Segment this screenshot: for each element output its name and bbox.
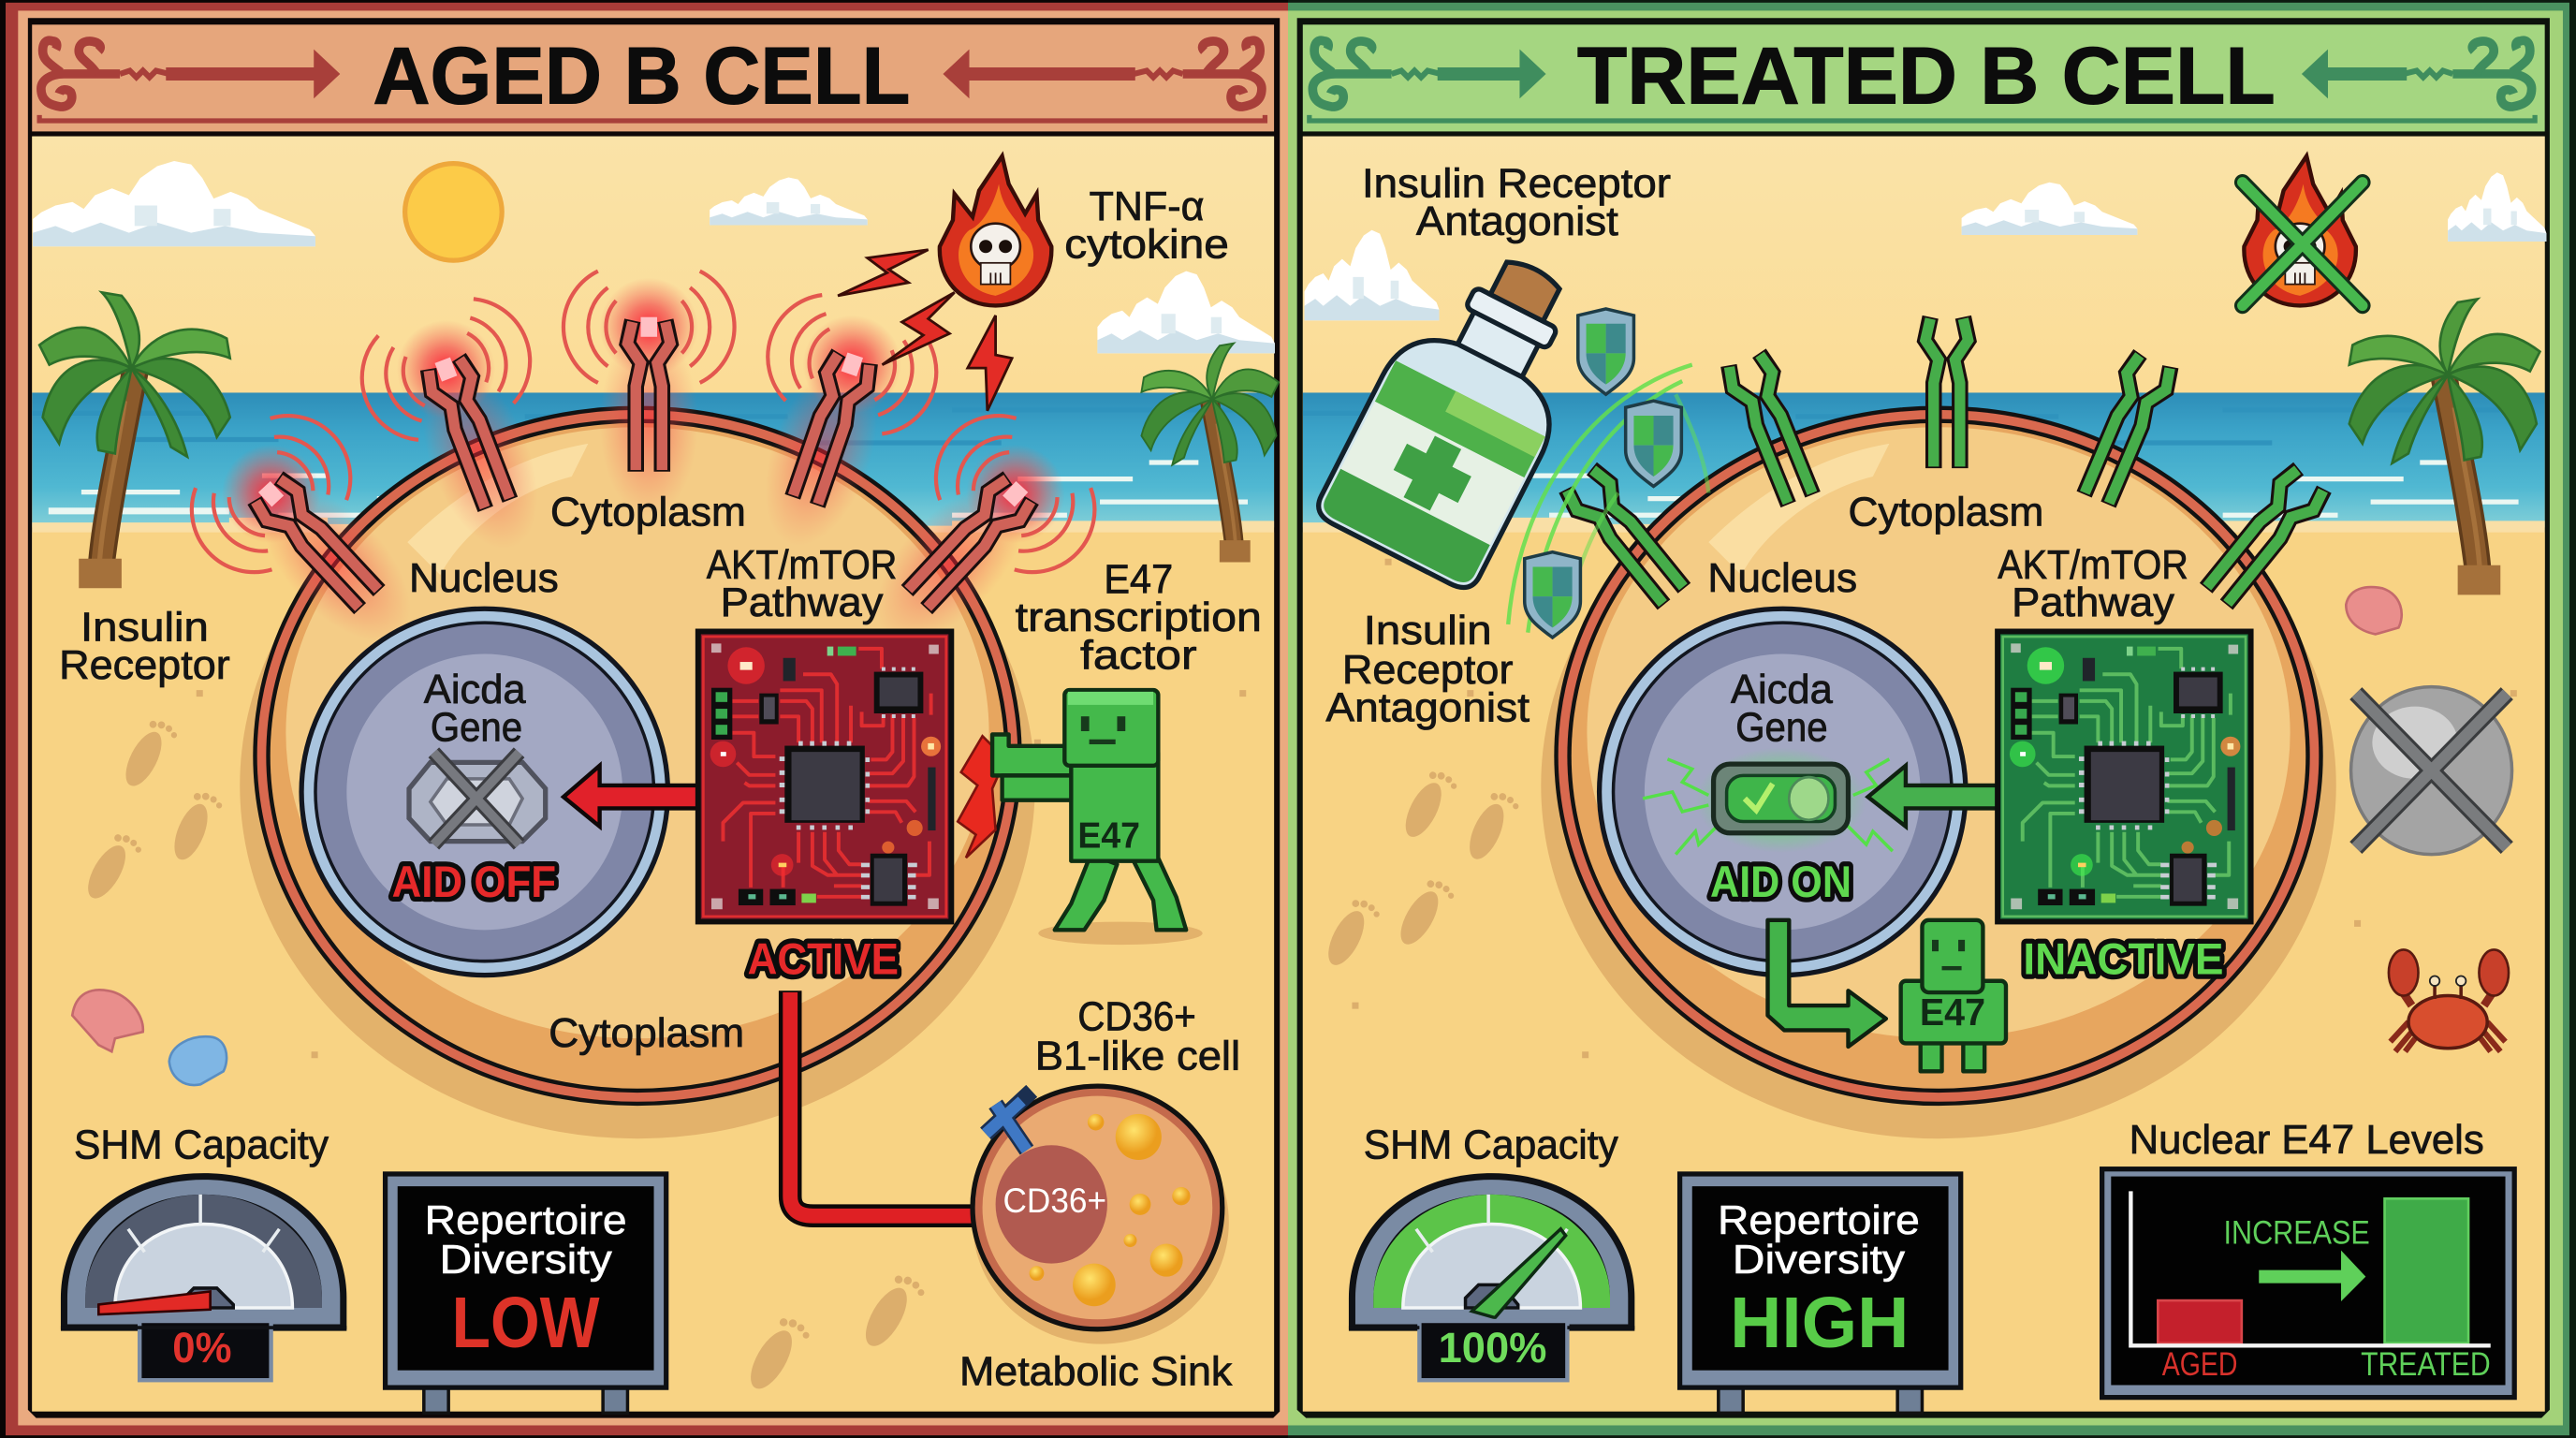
footprints bbox=[1320, 765, 1521, 976]
heading: treated B cell bbox=[1310, 32, 2535, 122]
gauge: SHM 0% bbox=[61, 1173, 346, 1380]
text: TNF-alpha cytokine bbox=[1064, 183, 1229, 268]
chart: nuclear E47 levels bbox=[2100, 1167, 2517, 1400]
label: CD36+ in nucleus: CD36+ bbox=[1003, 1181, 1106, 1220]
text: Aicda Gene: Gene bbox=[1735, 705, 1828, 751]
text: Aicda Gene bbox=[1731, 667, 1833, 751]
panel: aged B cell bbox=[0, 0, 1288, 1438]
signboard: repertoire diversity low: Diversity bbox=[439, 1237, 612, 1283]
text: Cytoplasm lower: Cytoplasm bbox=[549, 1010, 744, 1056]
label: AGED: AGED bbox=[2162, 1346, 2237, 1383]
icon: CD36+ cell with fat droplets bbox=[973, 1086, 1229, 1344]
value: 0%: 0% bbox=[172, 1324, 231, 1372]
text: AKT/mTOR Pathway: Pathway bbox=[2012, 580, 2174, 625]
arcs: antagonist spray bbox=[1508, 365, 1708, 633]
signboard: repertoire diversity high: Repertoire bbox=[1718, 1197, 1920, 1243]
text: Nucleus: Nucleus bbox=[409, 555, 559, 601]
text: Aicda Gene: Aicda bbox=[1731, 667, 1833, 712]
text: CD36+ B1-like cell: CD36+ bbox=[1077, 993, 1196, 1039]
text: AKT/mTOR Pathway bbox=[1998, 542, 2188, 625]
text: Aicda Gene: Gene bbox=[431, 705, 522, 751]
cell membrane and cytoplasm bbox=[240, 405, 1035, 1138]
icon: palm tree left bbox=[39, 292, 230, 588]
icon: shells bbox=[72, 990, 227, 1085]
arrow: red line to metabolic sink bbox=[790, 990, 979, 1216]
text: Cytoplasm: Cytoplasm bbox=[1848, 490, 2043, 536]
icon: shields bbox=[1525, 309, 1681, 638]
text: Insulin Receptor Antagonist left: Receptor bbox=[1342, 647, 1513, 693]
bar: treated bbox=[2385, 1198, 2468, 1343]
label: TREATED: TREATED bbox=[2361, 1346, 2491, 1383]
text: Insulin Receptor Antagonist left: Insulin bbox=[1364, 608, 1492, 653]
signboard: repertoire diversity high: Diversity bbox=[1733, 1237, 1905, 1283]
nucleus bbox=[1597, 607, 1969, 977]
icon: palm tree right bbox=[1141, 344, 1279, 563]
value: 100%: 100% bbox=[1439, 1324, 1546, 1372]
label: E47 on figure: E47 bbox=[1920, 990, 1985, 1034]
text: Insulin Receptor Antagonist top: Insulin Receptor bbox=[1362, 161, 1671, 207]
footprints bbox=[79, 714, 928, 1401]
icon: TNF-alpha flame with skull bbox=[940, 156, 1051, 305]
bar: aged bbox=[2158, 1300, 2242, 1343]
clouds bbox=[33, 161, 1275, 353]
signboard: repertoire diversity high bbox=[1677, 1171, 1963, 1413]
text: Insulin Receptor Antagonist top bbox=[1362, 161, 1671, 244]
nucleus bbox=[299, 607, 670, 977]
text: Insulin Receptor: Receptor bbox=[59, 642, 230, 688]
icon: palm tree bbox=[2349, 299, 2539, 594]
icon: pink shell bbox=[2346, 587, 2402, 634]
value: LOW: LOW bbox=[452, 1283, 600, 1363]
text: Insulin Receptor Antagonist left: Antagonist bbox=[1325, 684, 1530, 730]
icon: crossed-out grey orb bbox=[2351, 687, 2512, 855]
text: AKT/mTOR Pathway: Pathway bbox=[721, 580, 883, 625]
label: INCREASE: INCREASE bbox=[2224, 1215, 2370, 1252]
text: E47 transcription factor: transcription bbox=[1016, 594, 1262, 640]
label: INACTIVE: INACTIVE bbox=[2023, 935, 2224, 985]
label: AID ON: AID ON bbox=[1710, 858, 1852, 907]
label: ACTIVE: ACTIVE bbox=[748, 935, 899, 985]
icon: sun bbox=[402, 161, 505, 263]
text: Insulin Receptor Antagonist left bbox=[1325, 608, 1530, 730]
arrow: pathway to nucleus inhibited bbox=[564, 766, 700, 827]
text: AKT/mTOR Pathway: AKT/mTOR bbox=[707, 542, 897, 588]
text: Cytoplasm upper: Cytoplasm bbox=[550, 490, 746, 536]
circuit board: AKT/mTOR active bbox=[695, 629, 954, 924]
label: E47 on figure: E47 bbox=[1077, 816, 1140, 857]
clouds bbox=[1305, 172, 2546, 320]
circuit board: AKT/mTOR inactive bbox=[1995, 629, 2254, 924]
cell membrane and cytoplasm bbox=[1541, 405, 2336, 1138]
panel: treated B cell bbox=[1288, 0, 2576, 1438]
text: Insulin Receptor bbox=[59, 604, 230, 688]
text: SHM Capacity: SHM Capacity bbox=[74, 1122, 329, 1167]
text: Metabolic Sink: Metabolic Sink bbox=[959, 1348, 1232, 1394]
arrow: AID to E47 bbox=[1767, 920, 1886, 1047]
heading: aged B cell bbox=[39, 32, 1265, 122]
icon: switch crossed out bbox=[409, 753, 546, 844]
signboard: repertoire diversity low: Repertoire bbox=[425, 1197, 627, 1243]
text: TNF-alpha cytokine: TNF-α bbox=[1090, 183, 1204, 229]
text: Aicda Gene: Aicda bbox=[424, 667, 526, 712]
receptors: insulin receptors glowing bbox=[170, 271, 1116, 692]
receptors: blocked green bbox=[1562, 317, 2328, 609]
text: AKT/mTOR Pathway bbox=[707, 542, 897, 625]
text: Nuclear E47 Levels: Nuclear E47 Levels bbox=[2130, 1117, 2484, 1163]
icon: nuclear E47 figure bbox=[1901, 920, 2006, 1071]
icon: lightning bolts bbox=[838, 250, 1012, 411]
arrow: pathway to nucleus bbox=[1868, 766, 1999, 827]
signboard: repertoire diversity low bbox=[383, 1171, 668, 1413]
text: Insulin Receptor: Insulin bbox=[80, 604, 209, 650]
text: TNF-alpha cytokine: cytokine bbox=[1064, 222, 1229, 268]
text: CD36+ B1-like cell: B1-like cell bbox=[1035, 1034, 1240, 1079]
text: Nucleus: Nucleus bbox=[1707, 555, 1857, 601]
text: E47 transcription factor bbox=[1016, 557, 1262, 678]
gauge: SHM 100% bbox=[1349, 1173, 1634, 1380]
value: HIGH: HIGH bbox=[1730, 1283, 1909, 1363]
text: Aicda Gene bbox=[424, 667, 526, 751]
text: E47 transcription factor: E47 bbox=[1104, 557, 1173, 603]
heading: aged B cell: AGED B CELL bbox=[373, 32, 910, 122]
text: Insulin Receptor Antagonist top: Antagonist bbox=[1416, 198, 1618, 244]
text: E47 transcription factor: factor bbox=[1080, 632, 1197, 678]
text: AKT/mTOR Pathway: AKT/mTOR bbox=[1998, 542, 2188, 588]
heading: treated B cell: TREATED B CELL bbox=[1577, 32, 2276, 122]
icon: dead TNF flame with green X bbox=[2243, 156, 2363, 305]
icon: antagonist drug bottle bbox=[1312, 229, 1615, 594]
icon: crab bbox=[2389, 949, 2509, 1051]
arrow: increase bbox=[2259, 1251, 2365, 1301]
label: AID OFF: AID OFF bbox=[392, 858, 556, 907]
icon: E47 figure pushing bbox=[958, 690, 1203, 945]
icon: AID switch on bbox=[1643, 748, 1893, 855]
text: SHM Capacity: SHM Capacity bbox=[1364, 1122, 1618, 1167]
text: CD36+ B1-like cell bbox=[1035, 993, 1240, 1079]
